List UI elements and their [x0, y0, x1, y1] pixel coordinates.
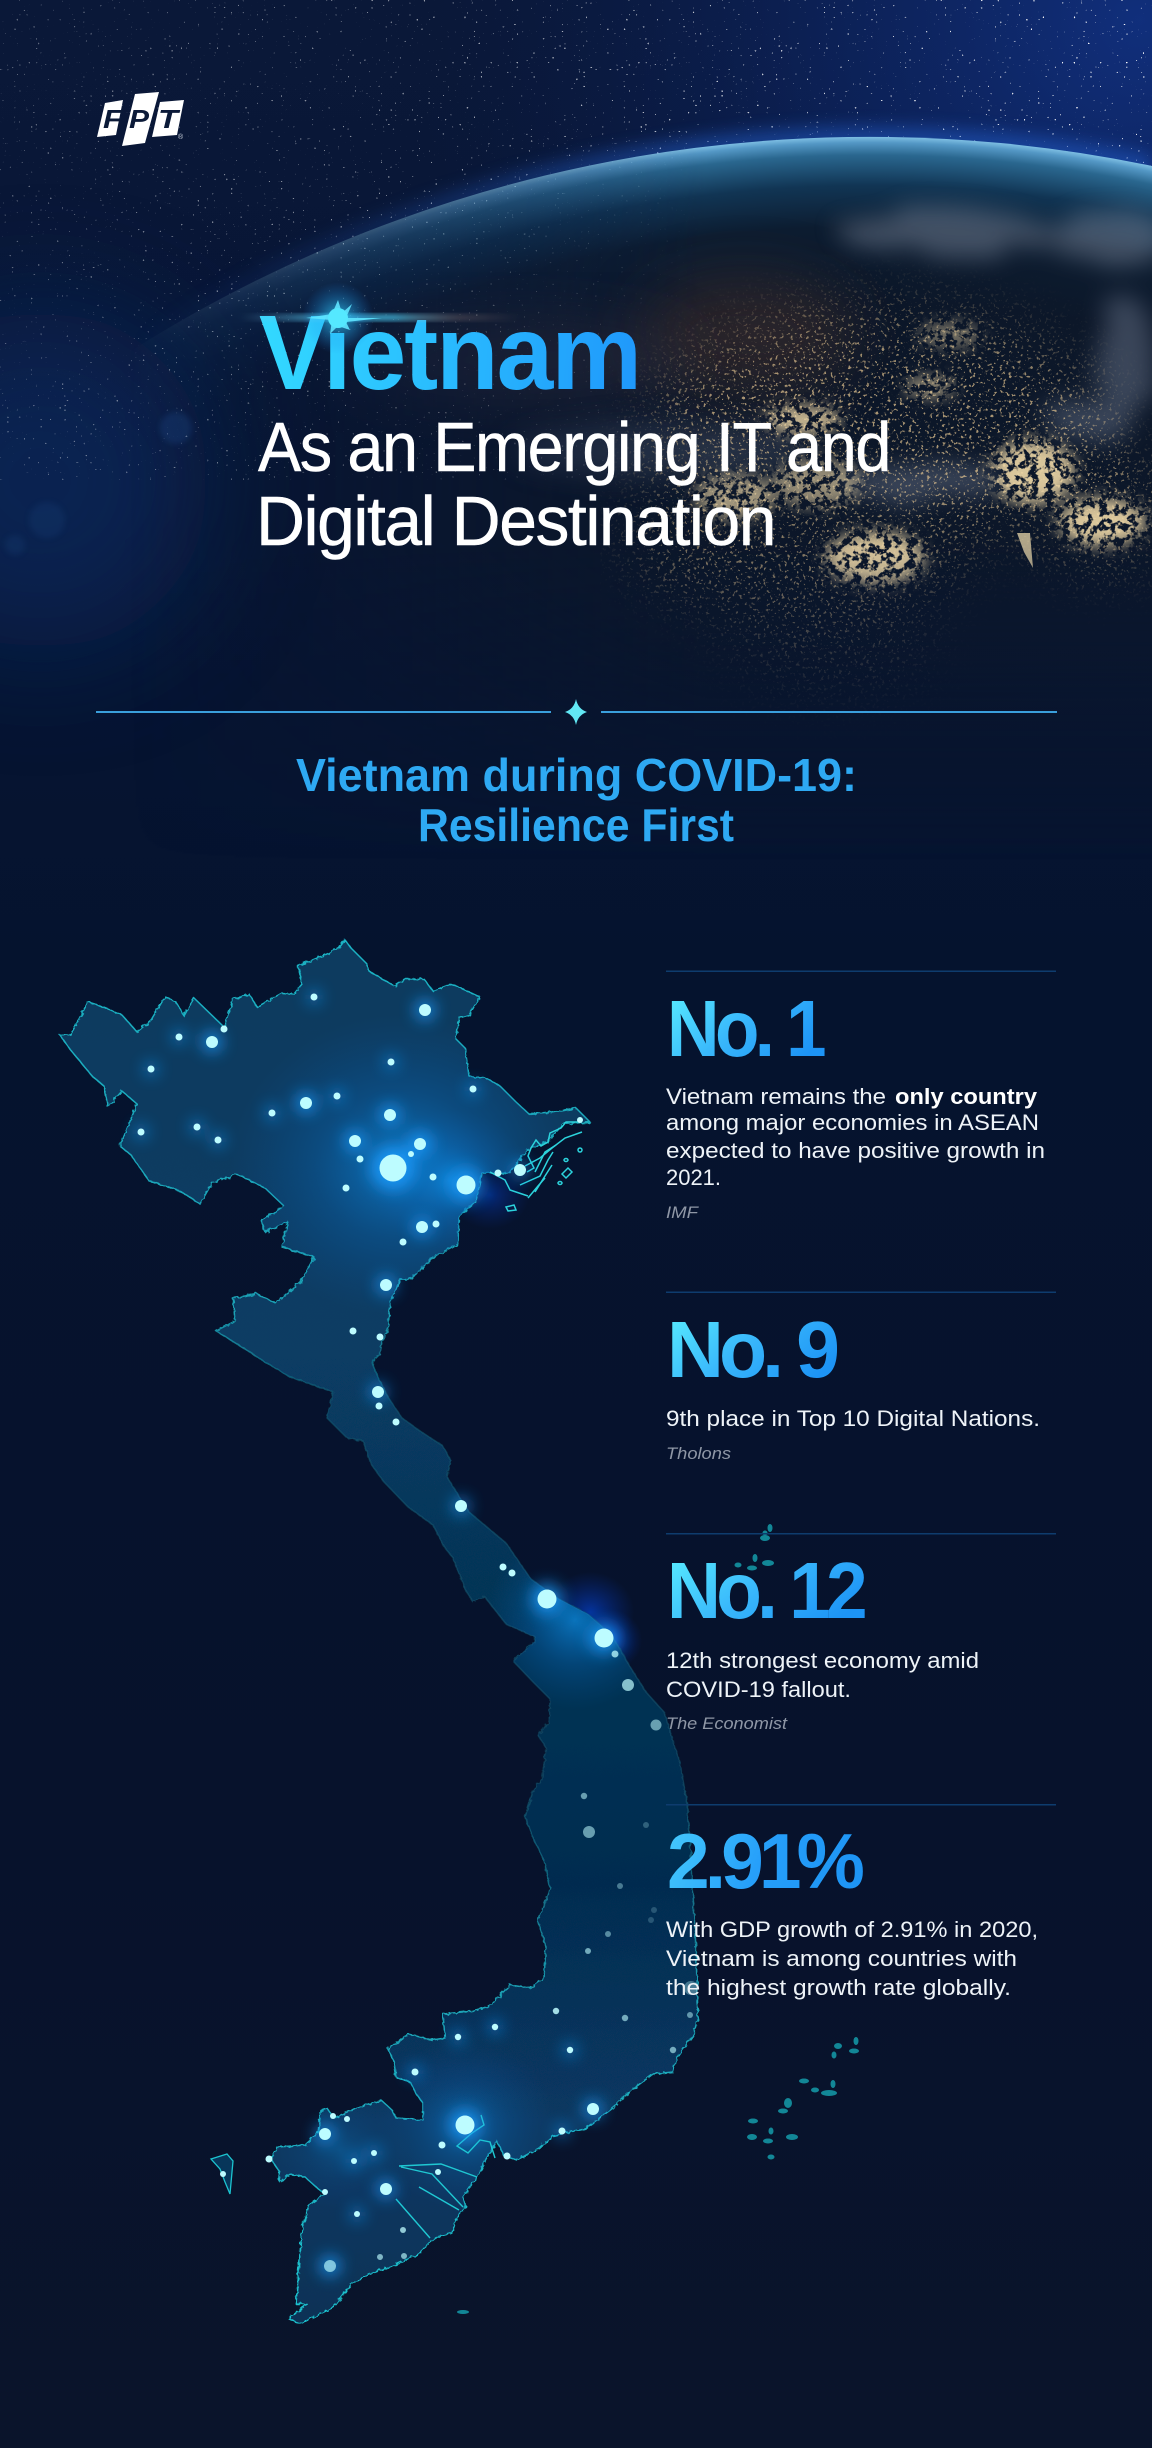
title: subtitle lines: [256, 408, 890, 560]
source: IMF: [666, 1203, 700, 1222]
country outline: [60, 940, 698, 2324]
stat: No. 9: [666, 1292, 1056, 1463]
title: Vietnam: Vietnam: [259, 294, 640, 412]
logo: FPT: [97, 92, 184, 146]
section heading: Resilience First: [418, 799, 734, 851]
map of Vietnam: [60, 940, 859, 2324]
description: [666, 1648, 979, 1702]
description: 12th strongest economy amid: [666, 1648, 979, 1673]
title: subtitle lines: As an Emerging IT and: [258, 408, 890, 486]
earth at night: [164, 118, 1152, 710]
lens flares: [5, 412, 192, 555]
description: 2021.: [666, 1165, 721, 1190]
stat: No. 1: No. 1: [667, 984, 825, 1073]
section heading: [296, 749, 857, 851]
description: [666, 1084, 1045, 1190]
stat: No. 12: [666, 1533, 1056, 1733]
sea glows: [450, 1161, 642, 1670]
stat: No. 1: [666, 970, 1056, 1222]
city dot glows: [135, 991, 619, 2276]
logo: FPT: T: [158, 104, 181, 134]
description: 9th place in Top 10 Digital Nations.: [666, 1406, 1040, 1431]
stat: 2.91%: 2.91%: [667, 1817, 864, 1905]
description: Vietnam is among countries with: [666, 1946, 1017, 1971]
Ha Long bay islands: [490, 1122, 582, 1211]
description: only country: [895, 1084, 1038, 1109]
Mekong delta and river lines: [396, 2115, 495, 2238]
source: Tholons: [666, 1444, 732, 1463]
city lights: [600, 269, 1152, 705]
stat: 2.91%: [666, 1804, 1056, 2000]
space sky with stars: [0, 0, 1152, 672]
land glows: [230, 1015, 665, 2210]
source: The Economist: [666, 1714, 788, 1733]
description: With GDP growth of 2.91% in 2020,: [666, 1917, 1038, 1942]
logo: FPT: P: [129, 104, 150, 134]
Phu Quoc island: [211, 2154, 233, 2194]
Paracel and Spratly islands: [457, 1524, 859, 2314]
stat: No. 9: No. 9: [667, 1305, 837, 1394]
stat: No. 12: No. 12: [667, 1546, 865, 1635]
divider with star: [96, 699, 1057, 725]
description: the highest growth rate globally.: [666, 1975, 1011, 2000]
description: [666, 1917, 1038, 2000]
logo: FPT: F: [103, 104, 123, 134]
title: subtitle lines: Digital Destination: [256, 482, 775, 560]
description: COVID-19 fallout.: [666, 1677, 851, 1702]
star flare on title: [240, 282, 520, 354]
description: among major economies in ASEAN: [666, 1110, 1039, 1135]
section heading: Vietnam during COVID-19:: [296, 749, 857, 801]
logo: FPT: ®: [178, 133, 184, 141]
city dots: [138, 994, 698, 2272]
icon: four-point star: [565, 699, 587, 725]
description: Vietnam remains the: [666, 1084, 886, 1109]
description: expected to have positive growth in: [666, 1138, 1045, 1163]
